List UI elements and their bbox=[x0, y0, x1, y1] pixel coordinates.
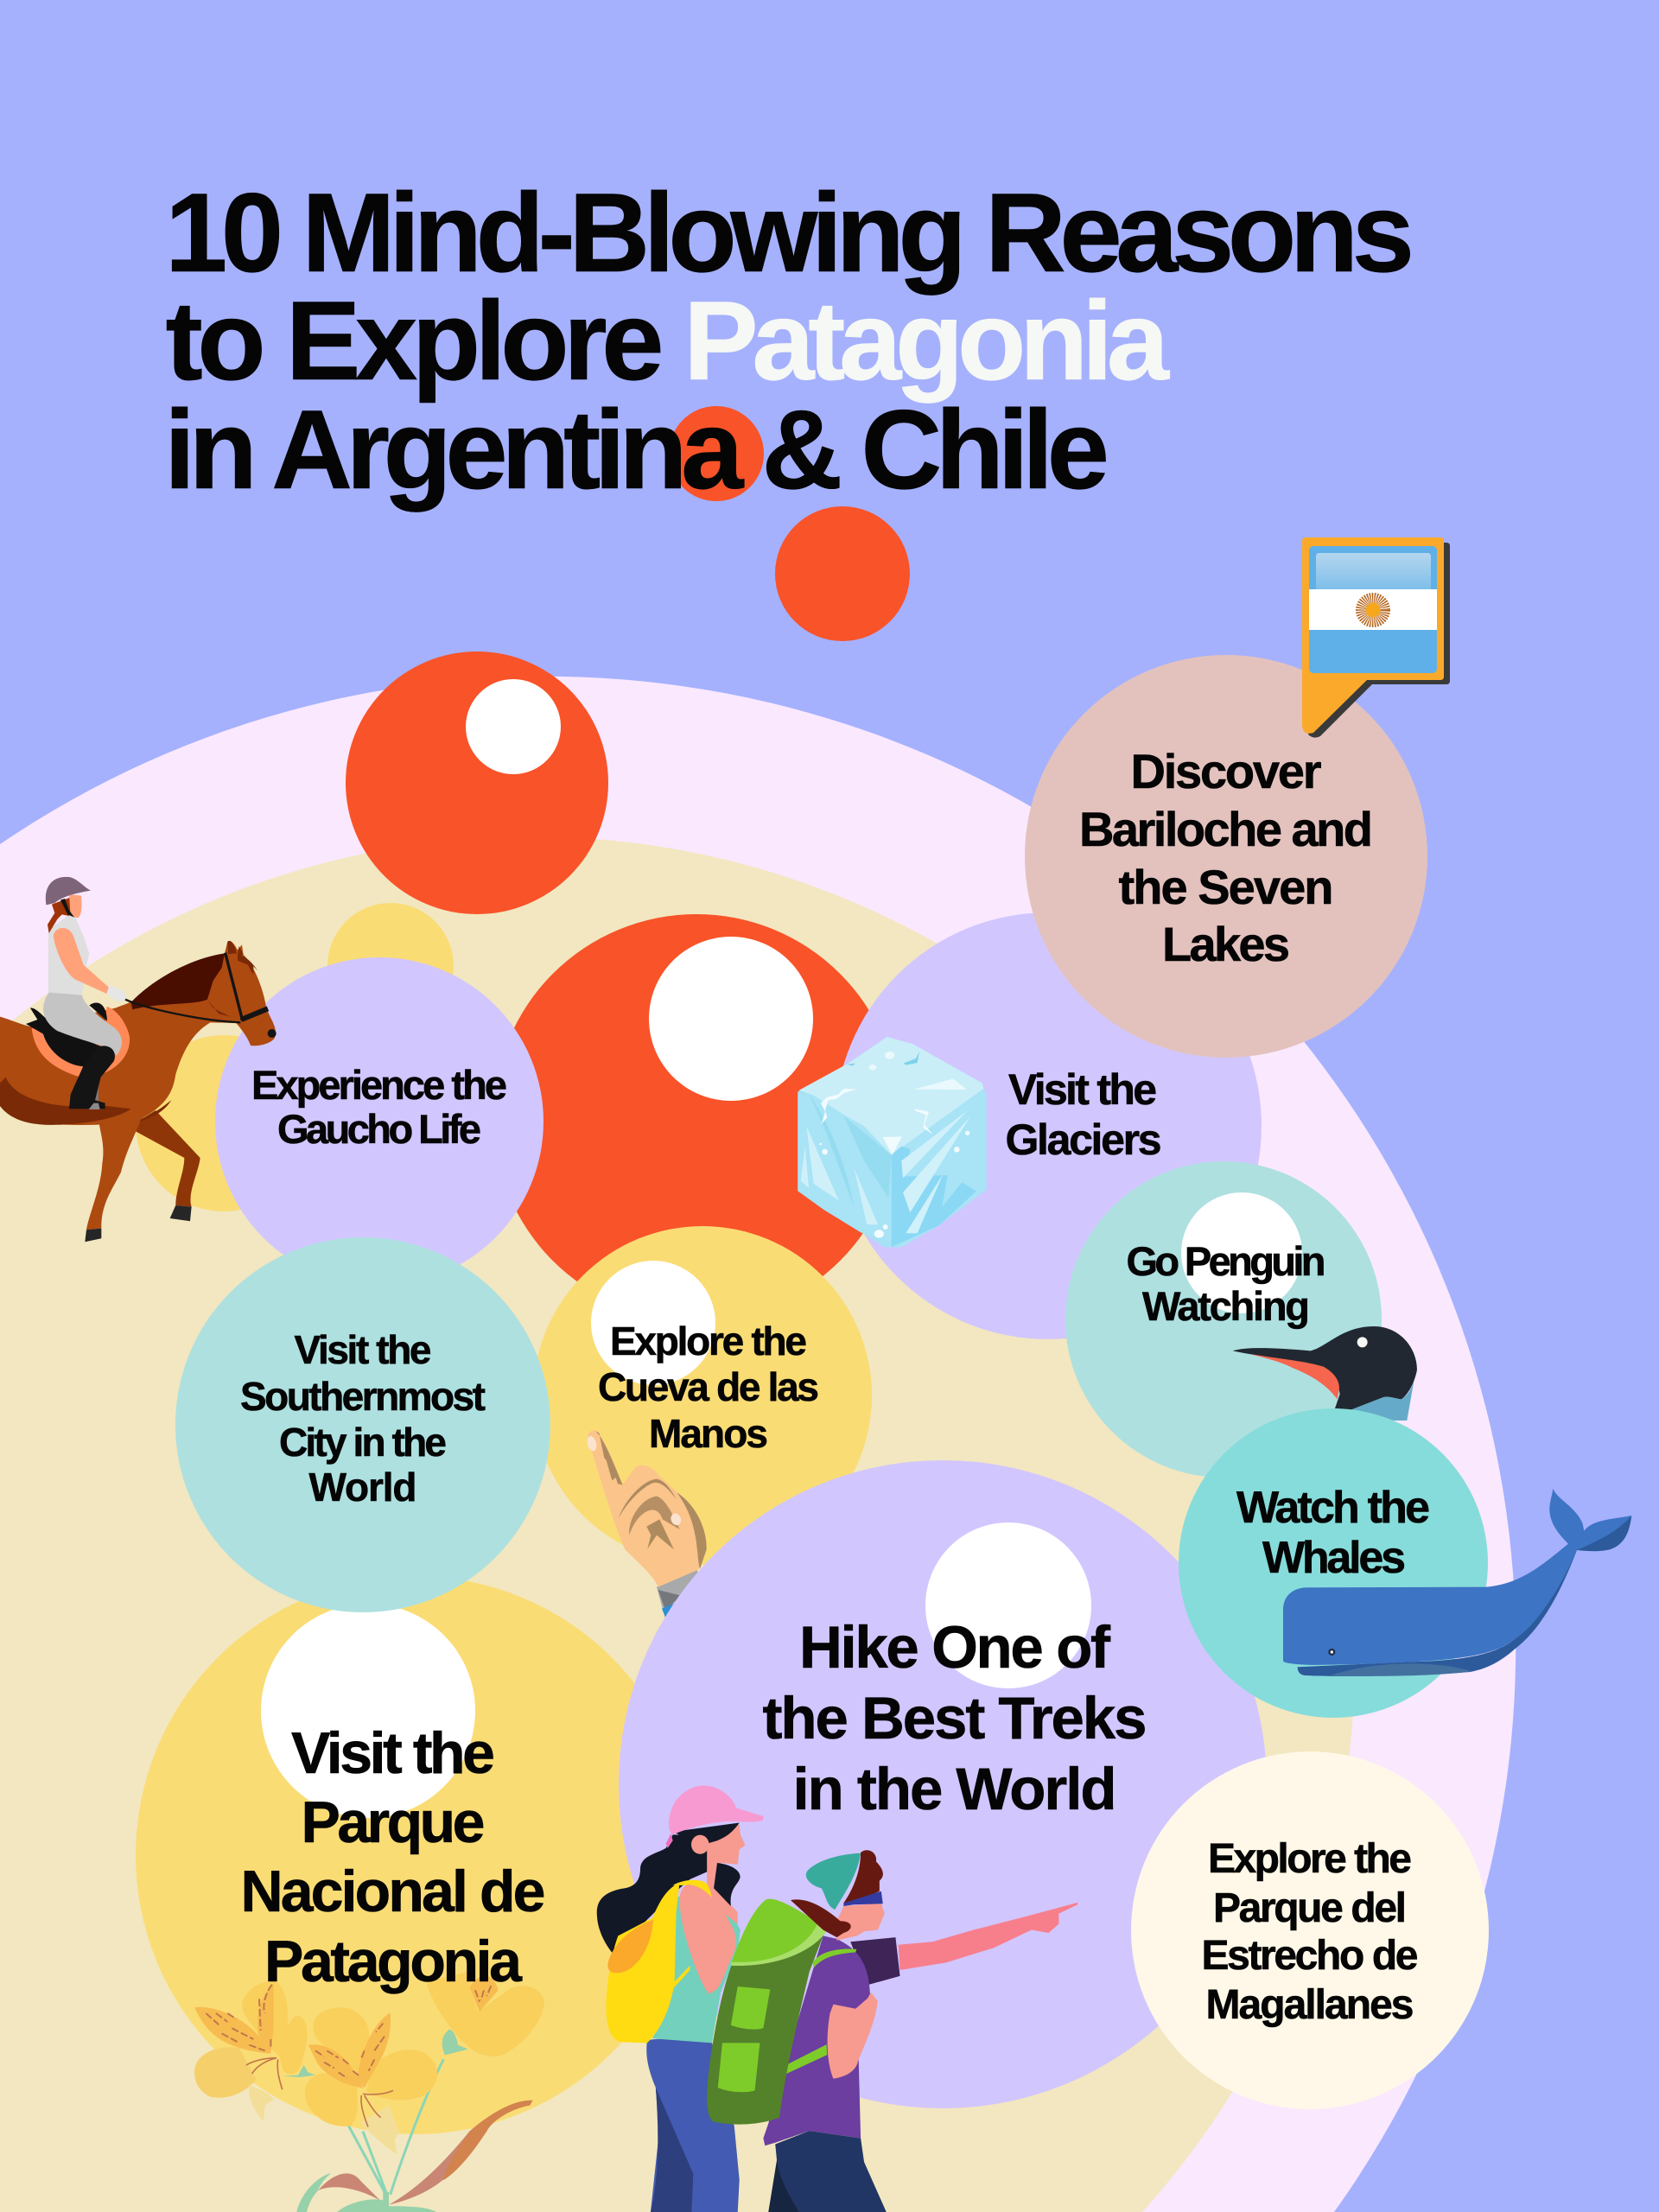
label: Southernmost: World bbox=[309, 1465, 416, 1510]
label: Bariloche: the Seven bbox=[1118, 860, 1334, 914]
label: Southernmost: Southernmost bbox=[240, 1374, 486, 1419]
panel: glaciers bbox=[835, 912, 1262, 1339]
label: Hike bbox=[762, 1614, 1147, 1822]
label: Parque Nacional: Parque bbox=[301, 1789, 486, 1855]
label: glaciers: Visit the bbox=[1008, 1065, 1157, 1114]
title: in Argentina & Chile bbox=[164, 386, 1109, 512]
label: Parque Nacional: Nacional de bbox=[240, 1859, 546, 1924]
label: Southernmost: Visit the bbox=[294, 1327, 432, 1372]
label: Bariloche: Discover bbox=[1130, 744, 1322, 798]
label: Magallanes: Parque del bbox=[1213, 1885, 1407, 1931]
icon: ice cube bbox=[798, 1037, 987, 1247]
label: Magallanes: Explore the bbox=[1208, 1836, 1412, 1882]
label: Bariloche: Bariloche and bbox=[1079, 802, 1373, 856]
label: gaucho bbox=[251, 1062, 507, 1152]
label: Parque Nacional: Visit the bbox=[291, 1720, 495, 1786]
decor: title red dot bbox=[669, 406, 764, 501]
label: Bariloche: Lakes bbox=[1162, 917, 1290, 971]
panel: Cueva de las Manos bbox=[533, 1226, 872, 1565]
illustration: flowers bbox=[194, 1970, 544, 2212]
label: penguin: Go Penguin bbox=[1127, 1238, 1325, 1284]
label: Cueva bbox=[598, 1319, 819, 1456]
title: Patagonia bbox=[683, 277, 1171, 404]
label: Cueva: Cueva de las bbox=[598, 1364, 819, 1409]
panel: Hike One of the Best Treks bbox=[619, 1460, 1267, 2108]
decor: small yellow bubbles bbox=[136, 903, 454, 1211]
illustration: hikers bbox=[597, 1785, 1077, 2212]
panel: Parque Nacional de Patagonia bbox=[136, 1576, 694, 2212]
label: Cueva: Explore the bbox=[610, 1319, 807, 1363]
label: Bariloche bbox=[1079, 744, 1373, 971]
label: Hike: in the World bbox=[793, 1756, 1116, 1822]
title: 10 Mind-Blowing Reasons bbox=[165, 169, 1414, 296]
decor: central red bubble bbox=[493, 914, 899, 1320]
panel: Southernmost City bbox=[175, 1237, 550, 1612]
label: glaciers bbox=[1006, 1065, 1161, 1164]
panel: Discover Bariloche bbox=[1025, 655, 1427, 1058]
icon: whale bbox=[1283, 1489, 1631, 1676]
label: Cueva: Manos bbox=[649, 1411, 768, 1456]
label: penguin: Watching bbox=[1142, 1283, 1310, 1329]
label: Magallanes: Estrecho de bbox=[1201, 1933, 1419, 1979]
icon: pointing hand bbox=[586, 1430, 707, 1618]
panel: Parque del Estrecho de Magallanes bbox=[1131, 1751, 1489, 2109]
label: Magallanes: Magallanes bbox=[1206, 1982, 1414, 2028]
title: to Explore bbox=[166, 277, 664, 404]
panel: Go Penguin Watching bbox=[1065, 1161, 1382, 1478]
decor: red dot bbox=[775, 506, 910, 641]
icon: penguin bbox=[1233, 1326, 1417, 1421]
label: Southernmost: City in the bbox=[279, 1420, 447, 1465]
label: whales: Whales bbox=[1262, 1533, 1406, 1583]
label: Magallanes bbox=[1201, 1836, 1419, 2028]
label: Southernmost bbox=[240, 1327, 486, 1510]
label: penguin bbox=[1127, 1238, 1325, 1329]
label: Hike: Hike One of bbox=[799, 1614, 1111, 1681]
panel: gaucho life bbox=[215, 957, 543, 1286]
label: Hike: the Best Treks bbox=[762, 1685, 1147, 1751]
panel: Watch the Whales bbox=[1179, 1408, 1488, 1718]
label: Parque Nacional: Patagonia bbox=[264, 1929, 523, 1994]
label: glaciers: Glaciers bbox=[1006, 1116, 1161, 1164]
icon: Argentina flag pin bbox=[1302, 537, 1450, 738]
title bbox=[164, 169, 1414, 512]
decor: large red bubble bbox=[346, 652, 608, 914]
label: gaucho: Experience the bbox=[251, 1062, 507, 1108]
label: Parque Nacional bbox=[240, 1720, 546, 1994]
label: gaucho: Gaucho Life bbox=[277, 1106, 481, 1152]
label: whales: Watch the bbox=[1236, 1483, 1430, 1533]
label: whales bbox=[1236, 1483, 1430, 1583]
illustration: horse and rider bbox=[0, 877, 276, 1242]
